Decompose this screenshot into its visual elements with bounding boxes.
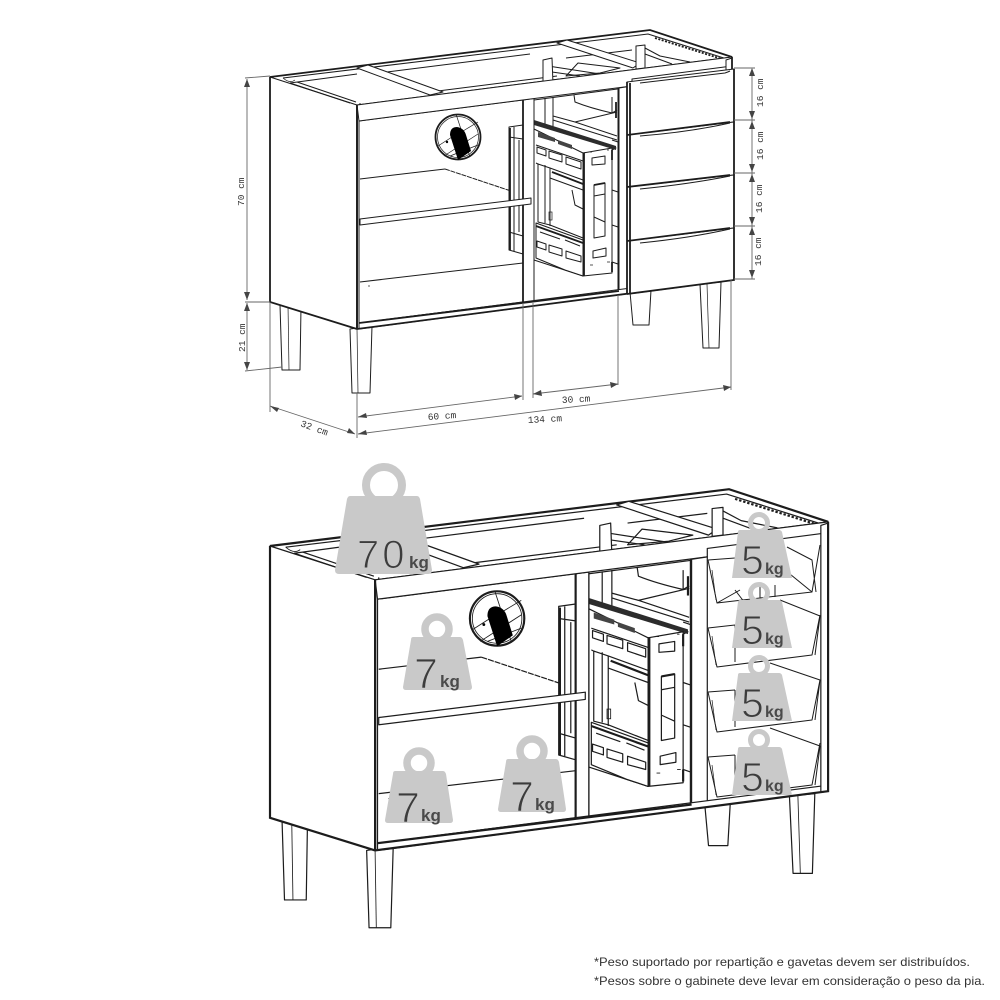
dimension: 30 cm width: 30 cm [562,394,591,406]
dimension: 21 cm leg height [237,303,282,371]
dimension: drawer heights 16 cm [734,68,766,279]
diagram: cabinet dimensions [236,30,766,439]
dimension: drawer heights 16 cm: 16 cm [754,184,765,213]
dimension: 134 cm total width [357,280,731,438]
weight: 7 kg lower shelf left [385,751,453,832]
weight: 5 kg drawer 1: 5 [741,537,764,583]
weight: 7 kg lower shelf left: kg [421,806,441,825]
footnotes [594,955,985,988]
weight: 5 kg drawer 2: kg [765,631,784,648]
weight: 5 kg drawer 2 [732,584,792,653]
dimension: 60 cm width: 60 cm [427,410,457,423]
weight: 70 kg on top [335,467,432,577]
weight: 7 kg lower shelf right: 7 [510,773,534,821]
cabinet carcass with pull-out rack [270,489,828,928]
weight: 70 kg on top: kg [409,553,429,572]
dimension: 60 cm width [358,303,523,423]
dimension: drawer heights 16 cm: 16 cm [753,237,764,266]
dimension: 70 cm height: 70 cm [236,177,247,206]
weight: 5 kg drawer 1 [732,514,792,583]
weight: 7 kg upper shelf: 7 [414,650,438,698]
weight: 5 kg drawer 4 [732,732,792,800]
weight: 5 kg drawer 3: 5 [741,680,764,726]
weight: 5 kg drawer 3: kg [765,704,784,721]
dimension: 21 cm leg height: 21 cm [237,323,248,352]
dimension: 30 cm width [533,295,618,406]
weight: 7 kg lower shelf left: 7 [396,784,420,832]
dimension: 32 cm depth [270,302,355,439]
weight: 7 kg lower shelf right: kg [535,795,555,814]
dimension: drawer heights 16 cm: 16 cm [755,131,766,160]
wire baskets [708,545,820,797]
weight: 5 kg drawer 3 [732,658,792,726]
weight: 5 kg drawer 4: 5 [741,754,764,800]
dimension: 70 cm height [236,76,270,302]
footnotes: *Peso suportado por repartição e gavetas devem ser distribuídos. [594,955,970,969]
weight: 70 kg on top: 70 [357,533,408,577]
weight: 7 kg upper shelf [403,617,472,698]
drawer fronts [627,69,734,294]
weight: 7 kg upper shelf: kg [440,672,460,691]
weight: 5 kg drawer 1: kg [765,561,784,578]
weight: 5 kg drawer 4: kg [765,778,784,795]
footnotes: *Pesos sobre o gabinete deve levar em consideração o peso da pia. [594,974,985,988]
diagram: cabinet load capacity [270,467,828,928]
weight: 7 kg lower shelf right [498,739,566,821]
weight: 5 kg drawer 2: 5 [741,607,764,653]
dimension: drawer heights 16 cm: 16 cm [755,78,766,107]
dimension: 134 cm total width: 134 cm [528,413,563,426]
cabinet carcass with pull-out rack [270,30,732,393]
dimension: 32 cm depth: 32 cm [299,418,330,439]
